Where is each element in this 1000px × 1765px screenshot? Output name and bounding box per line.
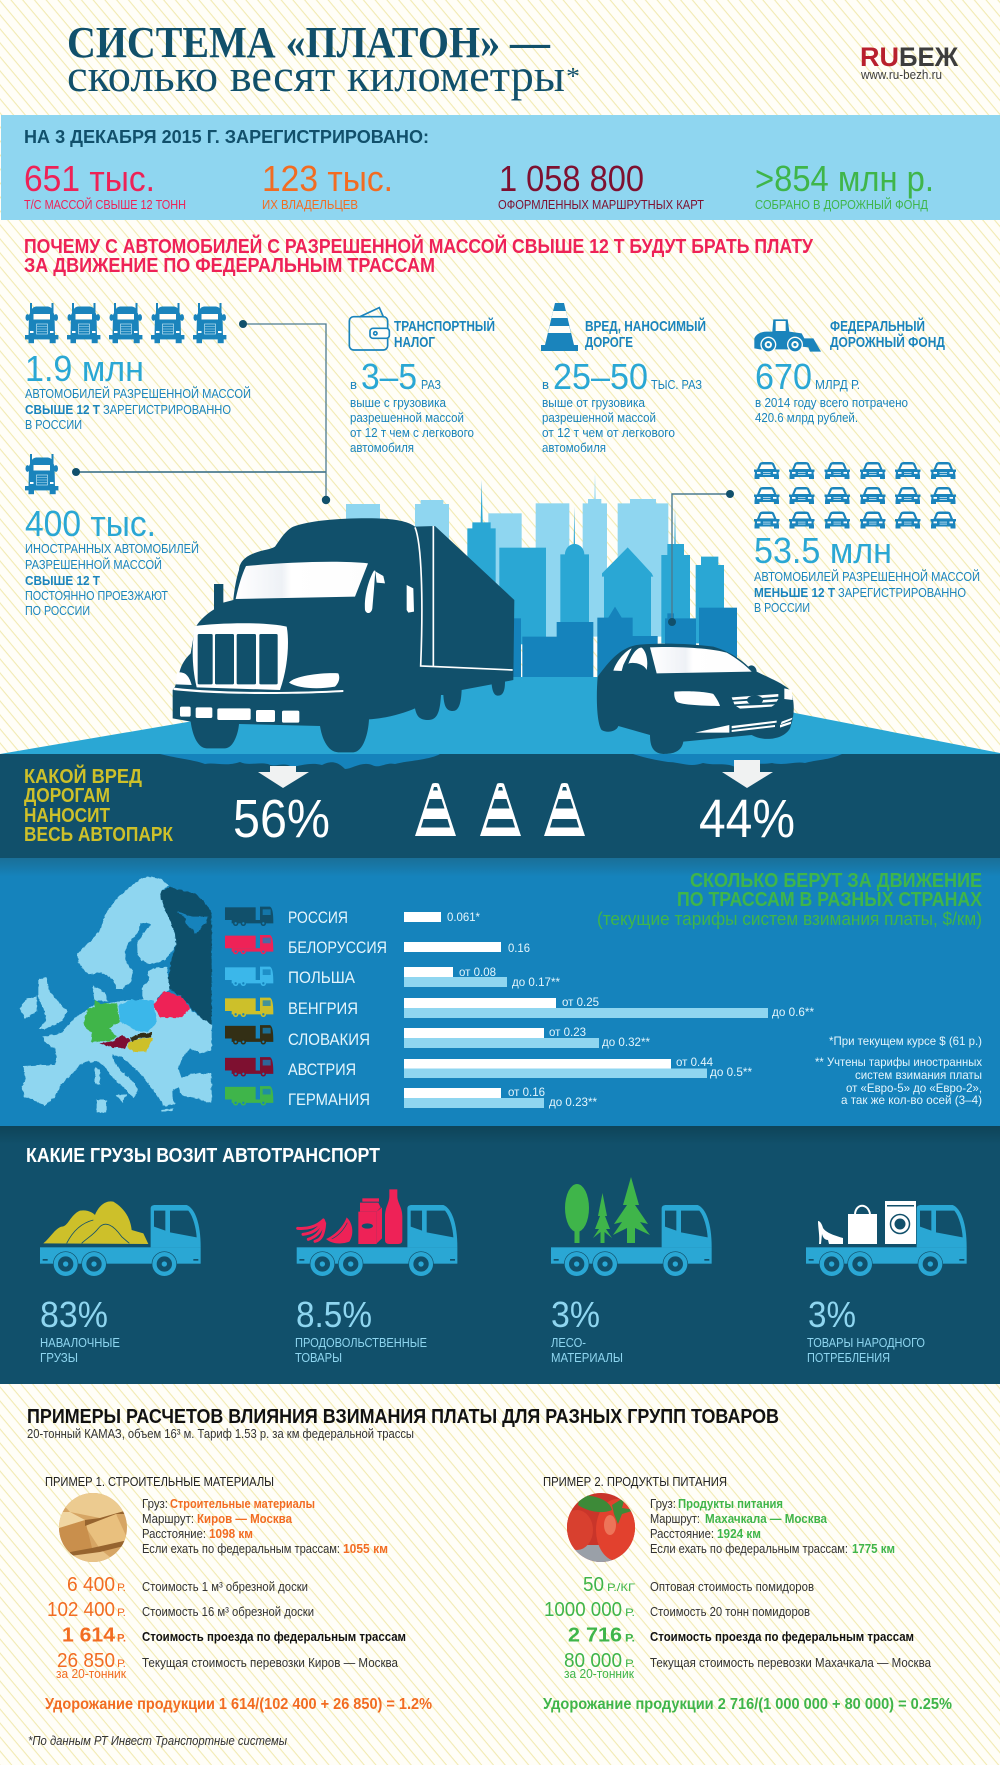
heading: registered: НА 3 ДЕКАБРЯ 2015 Г. ЗАРЕГИСТРИРОВАНО: [24,127,429,147]
stat: vehicles [24,158,186,212]
panel: example 2 food: 1924 км [717,1527,761,1541]
row: Poland: ПОЛЬША [288,968,356,987]
row: Austria: до 0.5** [710,1065,752,1079]
source footnote: *По данным РТ Инвест Транспортные системы [28,1734,287,1748]
panel: registered stats [1,115,1000,220]
photo: tomatoes [567,1493,635,1562]
heading: what damage [24,764,174,846]
panel: example 2 food: Расстояние: [650,1527,714,1541]
block: road fund: ДОРОЖНЫЙ ФОНД [830,333,945,351]
panel: example 1 building materials: 6 400 [67,1574,115,1596]
panel: example 2 food: Если ехать по федеральным трассам: [650,1542,848,1556]
block: road damage: разрешенной массой [542,411,656,425]
text: 1.9 million trucks: В РОССИИ [25,417,82,432]
text: 400 thousand foreign: РАЗРЕШЕННОЙ МАССОЙ [25,557,162,572]
panel: what trucks carry [0,1126,1000,1384]
block: transport tax: автомобиля [350,441,414,455]
text: 1.9 million trucks: СВЫШЕ 12 Т [25,402,100,417]
icon: wallet [349,308,389,350]
footnotes: tariffs: а так же кол-во осей (3–4) [841,1093,982,1107]
row: Belarus: 0.16 [508,941,530,955]
title [67,18,580,101]
panel: example 1 building materials: Текущая стоимость перевозки Киров — Москва [142,1656,398,1670]
row: Poland [225,965,560,989]
stat: owners: ИХ ВЛАДЕЛЬЦЕВ [262,198,358,212]
panel: example 1 building materials: Киров — Москва [197,1512,293,1526]
heading: what damage: ВЕСЬ АВТОПАРК [24,824,174,846]
panel: example 1 building materials: Р. [117,1632,126,1644]
logo: Rubezh: www.ru-bezh.ru [860,67,942,82]
row: Belarus [225,935,530,957]
cargo: food: ТОВАРЫ [295,1350,342,1365]
stat: 44 percent: 44% [699,789,795,849]
cargo: food: 8.5% [296,1294,372,1335]
block: road damage: ВРЕД, НАНОСИМЫЙ [585,317,706,335]
icon grid: cars [754,462,956,528]
block: transport tax: ТРАНСПОРТНЫЙ [394,317,495,335]
row: Germany: до 0.23** [549,1095,597,1109]
row: Russia [225,907,480,927]
footnotes: tariffs: систем взимания платы [855,1068,982,1082]
row: Poland: от 0.08 [459,965,496,979]
row: Slovakia: до 0.32** [602,1035,650,1049]
row: Hungary: ВЕНГРИЯ [288,999,358,1018]
panel: example 1 building materials: 1 614 [62,1624,116,1646]
connector: trucks to big truck [72,320,330,504]
block: road fund: МЛРД Р. [815,377,860,392]
panel: damage to roads [0,754,1000,858]
panel: example 1 building materials: Стоимость 1 м³ обрезной доски [142,1580,308,1594]
panel: example 2 food: 1775 км [852,1542,895,1556]
panel: example 2 food: 80 000 [564,1650,622,1672]
panel: tariffs by country [0,858,1000,1126]
Slovakia [130,1033,152,1042]
stat: vehicles: 651 тыс. [24,158,155,199]
text: 400 thousand foreign: ПОСТОЯННО ПРОЕЗЖАЮТ [25,588,168,603]
panel: example 1 building materials [45,1474,432,1713]
block: transport tax [350,317,495,455]
text: 53.5 million cars: МЕНЬШЕ 12 Т [754,585,835,600]
arrow: cars share [722,760,773,788]
panel: example 1 building materials: Р. [117,1658,126,1670]
cargo: timber: 3% [551,1294,600,1335]
logo: Rubezh: RU [860,42,899,72]
stat: route cards [498,158,704,212]
cargo: consumer goods: ПОТРЕБЛЕНИЯ [807,1350,890,1365]
panel: example 1 building materials: Маршрут: [142,1512,194,1526]
block: road fund: в 2014 году всего потрачено [755,396,908,410]
block: road damage: выше от грузовика [542,396,645,410]
panel: example 2 food: за 20-тонник [564,1667,634,1681]
heading: tariffs: (текущие тарифы систем взимания платы, $/км) [597,909,982,929]
panel: example 1 building materials: 102 400 [47,1599,115,1621]
cargo: bulk: 83% [40,1294,108,1335]
arrow: trucks share [258,766,309,788]
panel: example 2 food: Оптовая стоимость помидоров [650,1580,814,1594]
road [0,677,1000,754]
panel: example 1 building materials: Строительные материалы [170,1497,315,1511]
block: transport tax: РАЗ [421,377,441,392]
heading: calculation examples [27,1406,779,1441]
lamps and bumper lights [173,672,343,723]
cargo: consumer goods: ТОВАРЫ НАРОДНОГО [807,1335,925,1350]
heading: calculation examples: 20-тонный КАМАЗ, объем 16³ м. Тариф 1.53 р. за км федеральной трассы [27,1427,414,1441]
panel: example 1 building materials: Если ехать по федеральным трассам: [142,1542,340,1556]
footnotes: tariffs: ** Учтены тарифы иностранных [815,1055,982,1069]
title: * [566,64,580,90]
icon row: five trucks [25,303,226,343]
icon: loader tractor [754,319,821,352]
panel: example 1 building materials: 26 850 [57,1650,115,1672]
panel: example 1 building materials: 1098 км [209,1527,253,1541]
text: 400 thousand foreign: ИНОСТРАННЫХ АВТОМОБИЛЕЙ [25,541,199,556]
Austria [99,1035,130,1048]
block: transport tax: НАЛОГ [394,334,435,351]
panel: example 1 building materials: 1055 км [343,1542,388,1556]
block: road fund: ФЕДЕРАЛЬНЫЙ [830,317,925,335]
panel: example 1 building materials: ПРИМЕР 1. СТРОИТЕЛЬНЫЕ МАТЕРИАЛЫ [45,1474,274,1489]
stat: route cards: ОФОРМЛЕННЫХ МАРШРУТНЫХ КАРТ [498,198,704,212]
footnotes: tariffs: от «Евро-5» до «Евро-2», [846,1081,982,1095]
block: road damage: от 12 т чем от легкового [542,426,675,440]
stat: route cards: 1 058 800 [499,158,644,199]
heading: why charge: ПОЧЕМУ С АВТОМОБИЛЕЙ С РАЗРЕШЕННОЙ МАССОЙ СВЫШЕ 12 Т БУДУТ БРАТЬ ПЛАТУ [24,234,813,258]
panel: example 1 building materials: Груз: [142,1497,168,1511]
text: 400 thousand foreign: СВЫШЕ 12 Т [25,573,100,588]
Germany [83,999,120,1042]
Belarus [153,991,190,1018]
cargo: consumer goods [806,1201,967,1365]
trailer edge lines [415,526,513,670]
panel: example 2 food: Груз: [650,1497,676,1511]
block: road damage: автомобиля [542,441,606,455]
panel: example 2 food: Маршрут: [650,1512,700,1526]
grille [193,623,288,690]
block: road damage [542,317,706,455]
panel: example 2 food: Текущая стоимость перевозки Махачкала — Москва [650,1656,931,1670]
stat: 56 percent: 56% [233,789,330,849]
illustration: big car [597,644,794,754]
connector: cars to big car [668,490,734,626]
logo: Rubezh: БЕЖ [899,42,959,72]
row: Hungary: до 0.6** [772,1005,814,1019]
heading: what damage: ДОРОГАМ [24,785,110,807]
block: transport tax: 3–5 [361,356,417,397]
panel: example 2 food: Махачкала — Москва [705,1512,828,1526]
stat: road fund: >854 млн р. [755,158,934,199]
photo: timber [59,1493,128,1562]
footnotes: tariffs [815,1034,982,1107]
panel: example 2 food: ПРИМЕР 2. ПРОДУКТЫ ПИТАНИЯ [543,1474,727,1489]
text: 1.9 million trucks: 1.9 млн [25,348,144,389]
row: Austria: АВСТРИЯ [288,1060,356,1079]
cargo: timber: ЛЕСО- [551,1335,586,1350]
windscreen [236,562,368,599]
block: transport tax: в [350,377,357,392]
footnotes: tariffs: *При текущем курсе $ (61 р.) [829,1034,982,1048]
block: road damage: в [542,377,549,392]
block: road damage: ДОРОГЕ [585,334,633,351]
heading: what damage: НАНОСИТ [24,805,110,827]
cargo: bulk: НАВАЛОЧНЫЕ [40,1335,120,1350]
block: road fund: 420.6 млрд рублей. [755,411,858,425]
heading: cargo: КАКИЕ ГРУЗЫ ВОЗИТ АВТОТРАНСПОРТ [26,1145,380,1167]
block: road fund [755,317,945,425]
panel: example 2 food: Р. [625,1658,635,1670]
block: road damage: ТЫС. РАЗ [651,377,702,392]
row: Germany: ГЕРМАНИЯ [288,1090,370,1109]
panel: example 2 food: Р./КГ [607,1582,635,1594]
panel: example 1 building materials: Стоимость проезда по федеральным трассам [142,1630,406,1644]
panel: example 2 food: 2 716 [568,1624,622,1646]
logo: Rubezh [860,42,959,82]
panel: example 2 food: Стоимость проезда по федеральным трассам [650,1630,914,1644]
map: Europe [20,877,212,1112]
icon: road cone [541,303,578,351]
row: Slovakia: от 0.23 [549,1025,586,1039]
cargo: bulk: ГРУЗЫ [40,1350,78,1365]
cargo: timber [551,1177,712,1365]
panel: example 1 building materials: Расстояние: [142,1527,206,1541]
panel: example 2 food [543,1474,952,1713]
stat: road fund: СОБРАНО В ДОРОЖНЫЙ ФОНД [755,197,928,212]
text: 53.5 million cars [754,530,980,615]
row: Slovakia [225,1025,650,1049]
icons: three cones [415,783,585,836]
stat: vehicles: Т/С МАССОЙ СВЫШЕ 12 ТОНН [24,197,186,212]
row: Slovakia: СЛОВАКИЯ [288,1030,370,1049]
text: 400 thousand foreign: 400 тыс. [25,503,156,544]
row: Austria [225,1055,752,1079]
text: 53.5 million cars: ЗАРЕГИСТРИРОВАННО [838,585,966,600]
block: road damage: 25–50 [553,356,648,397]
text: 1.9 million trucks [25,348,251,432]
cargo: food [295,1189,457,1365]
illustration: city skyline [346,473,737,677]
cargo: bulk [40,1201,201,1365]
Russia [160,887,212,1024]
row: Germany [225,1085,597,1109]
block: transport tax: выше с грузовика [350,396,446,410]
headlight and grille [674,688,793,733]
heading: tariffs [597,870,983,929]
illustration: big truck [173,518,514,752]
heading: what damage: КАКОЙ ВРЕД [24,764,142,788]
text: 53.5 million cars: 53.5 млн [754,530,892,571]
panel: example 1 building materials: Р. [117,1582,126,1594]
row: Austria: от 0.44 [676,1055,713,1069]
text: 1.9 million trucks: АВТОМОБИЛЕЙ РАЗРЕШЕННОЙ МАССОЙ [25,386,251,401]
panel: example 2 food: Стоимость 20 тонн помидоров [650,1605,810,1619]
road underside drips [160,754,842,769]
row: Poland: до 0.17** [512,975,560,989]
panel: example 1 building materials: за 20-тонник [56,1667,126,1681]
title: сколько весят километры [67,50,565,101]
heading: why charge: ЗА ДВИЖЕНИЕ ПО ФЕДЕРАЛЬНЫМ ТРАССАМ [24,255,435,277]
block: transport tax: от 12 т чем с легкового [350,426,474,440]
row: Russia: 0.061* [447,910,480,924]
Hungary [128,1038,153,1052]
panel: example 2 food: 50 [583,1574,604,1596]
cargo: food: ПРОДОВОЛЬСТВЕННЫЕ [295,1335,427,1350]
panel: example 2 food: Р. [625,1632,635,1644]
text: 400 thousand foreign: ПО РОССИИ [25,603,90,618]
text: 400 thousand foreign [25,503,199,618]
stat: owners: 123 тыс. [262,158,393,199]
icon: single truck [25,454,58,494]
windshield and side windows [650,647,752,673]
text: 53.5 million cars: В РОССИИ [754,600,810,615]
panel: example 2 food: 1000 000 [544,1599,622,1621]
title: СИСТЕМА «ПЛАТОН» — [67,18,551,67]
cargo: timber: МАТЕРИАЛЫ [551,1350,623,1365]
panel: example 1 building materials: Удорожание продукции 1 614/(102 400 + 26 850) = 1.2% [45,1696,432,1713]
row: Russia: РОССИЯ [288,908,348,927]
heading: calculation examples: ПРИМЕРЫ РАСЧЕТОВ ВЛИЯНИЯ ВЗИМАНИЯ ПЛАТЫ ДЛЯ РАЗНЫХ ГРУПП ТОВАРОВ [27,1406,779,1428]
block: transport tax: разрешенной массой [350,411,464,425]
side windows [365,571,414,613]
row: Belarus: БЕЛОРУССИЯ [288,938,387,957]
row: Hungary [225,995,814,1019]
panel: example 2 food: Удорожание продукции 2 716/(1 000 000 + 80 000) = 0.25% [543,1696,952,1713]
panel: example 1 building materials: Р. [117,1607,126,1619]
row: Germany: от 0.16 [508,1085,545,1099]
cargo: consumer goods: 3% [808,1294,856,1335]
panel: example 1 building materials: Стоимость 16 м³ обрезной доски [142,1605,314,1619]
panel: example 2 food: Р. [625,1607,635,1619]
Poland [118,1000,157,1032]
heading: why charge [24,234,813,277]
text: 1.9 million trucks: ЗАРЕГИСТРИРОВАННО [103,402,231,417]
block: road fund: 670 [755,356,812,397]
panel: example 2 food: Продукты питания [678,1497,783,1511]
row: Hungary: от 0.25 [562,995,599,1009]
